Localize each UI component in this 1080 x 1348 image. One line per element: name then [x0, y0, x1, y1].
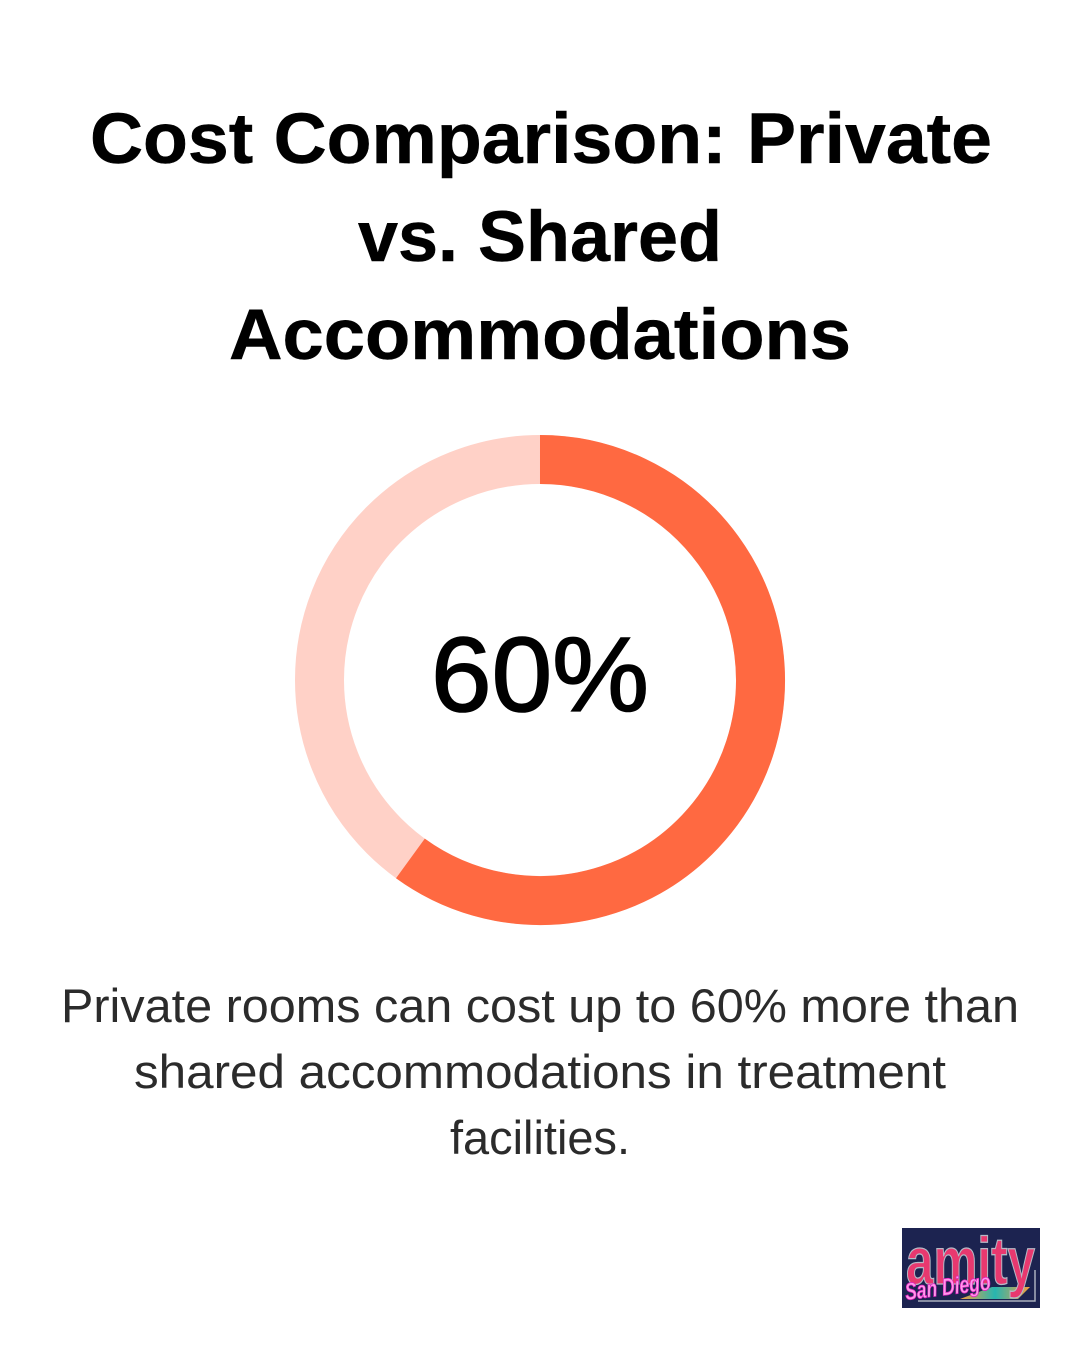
donut chart: 60% [320, 460, 760, 900]
title [90, 100, 992, 375]
title: Cost Comparison: Private [90, 100, 992, 179]
logo: Amity San Diego: amity [906, 1225, 1035, 1299]
description text: Private rooms can cost up to 60% more than [61, 979, 1019, 1032]
description text: shared accommodations in treatment [134, 1045, 946, 1098]
description text [61, 979, 1019, 1164]
title: Accommodations [229, 296, 851, 375]
description text: facilities. [450, 1111, 630, 1164]
logo: Amity San Diego: San Diego [903, 1269, 992, 1306]
donut value: 60% [431, 616, 649, 734]
title: vs. Shared [358, 198, 722, 277]
